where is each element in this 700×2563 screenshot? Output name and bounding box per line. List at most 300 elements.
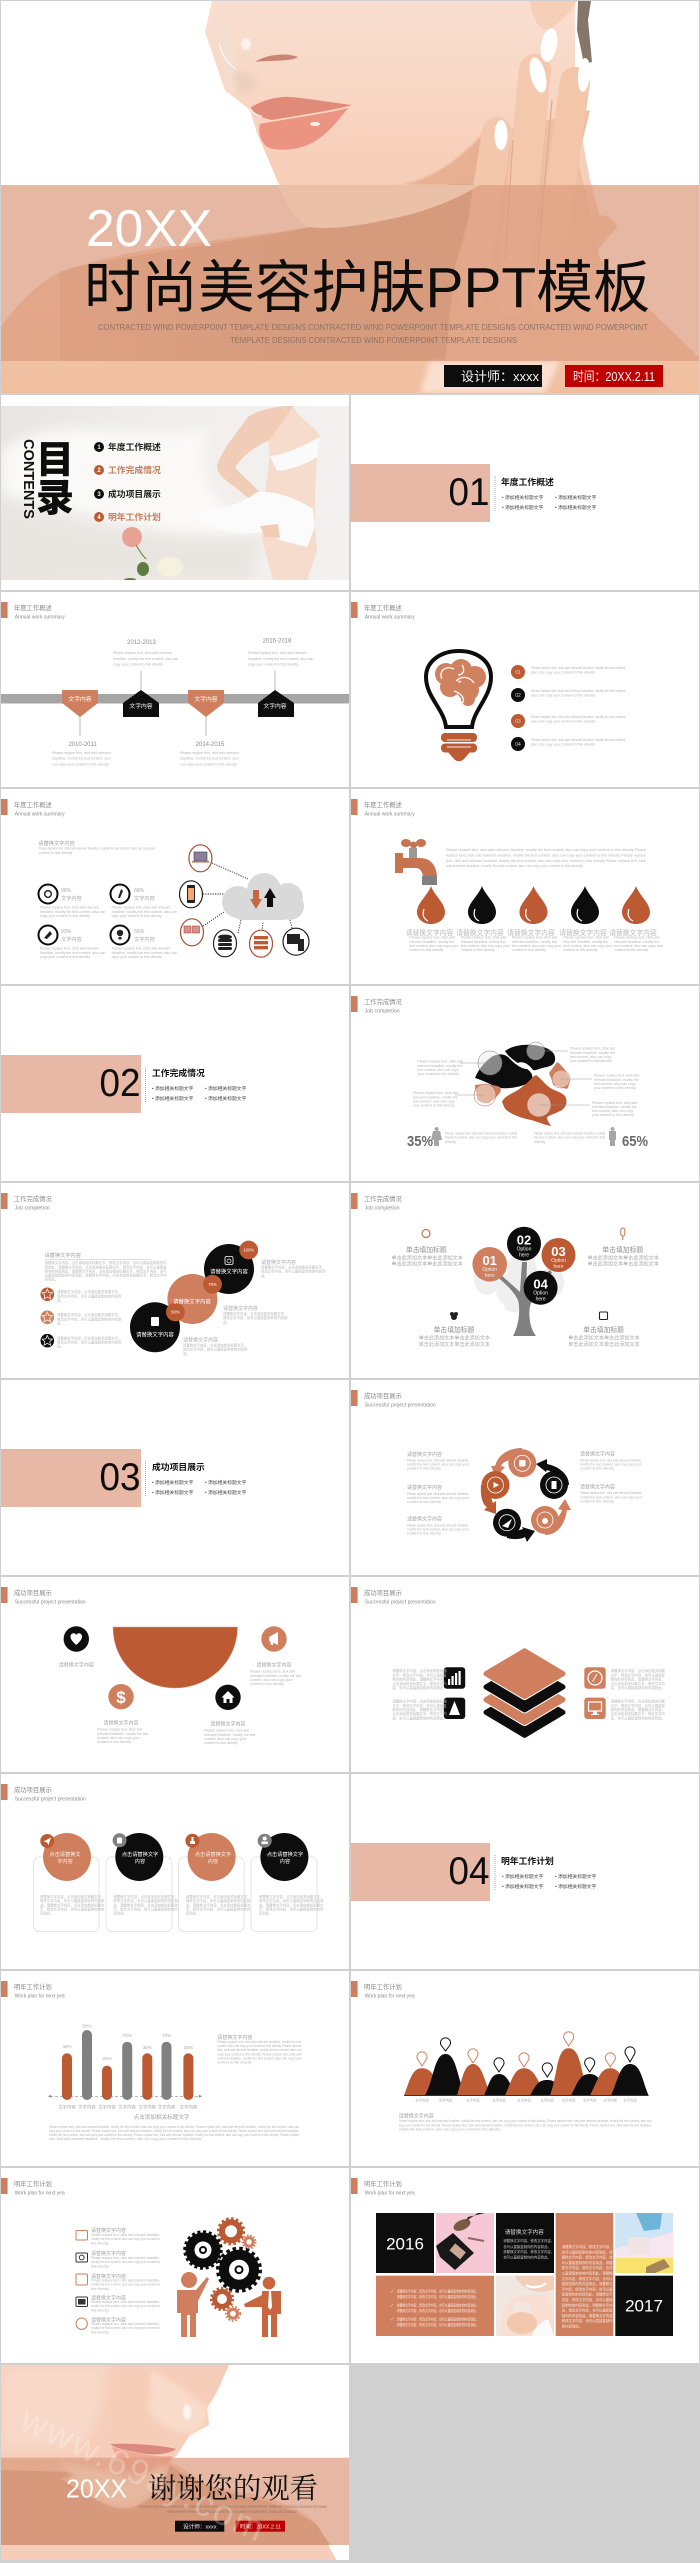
- tree labels: 单击填加标题: [406, 1245, 447, 1254]
- timeline labels: Please replace text, click add relevant: [113, 651, 172, 655]
- intro text: 以直接复制你的内容到此。请替换文字内容，点击添加相关标题文字，修改文字内: [45, 1272, 167, 1277]
- callout text: relevant headline, modify the: [570, 1051, 615, 1055]
- card text: 字，修改文字内容，也可以直接复制你的内: [259, 1906, 324, 1911]
- cell: tall orange text: 也可以直接复制你的内容到此。请: [562, 2249, 613, 2254]
- cycle text: Please replace text, click add relevant headline,: [407, 1458, 469, 1462]
- panel: section 01: • 添加相关标题文字: [502, 504, 544, 511]
- icon list: modify the text content, also can copy your content to: [91, 2283, 160, 2287]
- star list: 请替换文字内容，点击添加相关标题文字，: [57, 1335, 121, 1340]
- icon list: modify the text content, also can copy your content to: [91, 2304, 160, 2308]
- cards: [34, 1833, 317, 1932]
- stats: copy your content to this directly.: [112, 914, 162, 918]
- band: [1, 2458, 349, 2545]
- callout text: relevant headline, modify the: [592, 1105, 637, 1109]
- list: also can copy your content to this directly.: [531, 694, 596, 698]
- paragraph: Please replace text, click add relevant headline, modify the text content, also can copy your content to this directly Please: [446, 848, 646, 852]
- heading: [1, 799, 65, 818]
- panel: gears slide: [1, 2168, 349, 2363]
- gender stats: [407, 1127, 648, 1150]
- chart labels: 文字内容: [623, 2098, 637, 2102]
- list: Please replace text, click add relevant headline, modify the text content,: [531, 689, 626, 693]
- list: [94, 441, 161, 522]
- side text: 点击添加相关标题文字，修改文字内: [611, 1711, 666, 1716]
- heading: 年度工作概述: [14, 603, 52, 612]
- star list: [40, 1288, 122, 1349]
- stats: 文字内容: [134, 935, 155, 943]
- chart note: Please replace text, click add relevant headline, modify the text content, also can copy your content to this directly. Please replace text, click add relevant headline, modify the text content, also can: [399, 2119, 652, 2123]
- drop labels: content to this directly.: [614, 948, 649, 952]
- cell: tall orange text: 修改文字内容，也可以直接复制你: [562, 2318, 613, 2323]
- chart note: 点击添加相关标题文字: [134, 2113, 190, 2121]
- cell: wide orange checklist: ✓: [391, 2304, 394, 2308]
- drops: [417, 886, 650, 924]
- card text: 容到此。: [186, 1910, 200, 1916]
- cell: black text: [496, 2213, 554, 2273]
- side text: 此。: [223, 1320, 230, 1324]
- stacked diamonds: [486, 1651, 563, 1735]
- heading: 工作完成情况: [364, 1194, 402, 1203]
- heading: 工作完成情况: [364, 997, 402, 1006]
- heading: Job completion: [15, 1206, 50, 1212]
- chart note: modify the text content, also can copy your content to this directly. Please replace text, click add relevant headline, modify the text content, also can copy your content to this directly. Please replace: [49, 2133, 299, 2137]
- panel: section 03: • 添加相关标题文字: [152, 1479, 194, 1486]
- cycle text: 请替换文字内容: [407, 1484, 442, 1491]
- title: 目录: 目: [36, 440, 74, 482]
- tree: 01: [482, 1253, 497, 1268]
- timeline: [1, 671, 349, 736]
- timeline labels: can copy your content to this directly.: [52, 762, 109, 766]
- drop labels: relevant headline, modify the: [512, 940, 557, 944]
- bar chart: 70%: [162, 2033, 171, 2038]
- tree labels: 单击此添加文本单击此添加文本: [588, 1260, 659, 1268]
- cell: wide orange checklist: 请替换文字内容，修改文字内容，也可以直接复制你的内容到此。: [397, 2308, 479, 2313]
- closing subtitle: [138, 2505, 327, 2514]
- stats: 文字内容: [61, 894, 82, 902]
- panel: section 04: 明年工作计划: [501, 1855, 554, 1866]
- cell: tall orange text: [556, 2213, 616, 2336]
- callout text: text content, also can copy: [594, 1082, 636, 1086]
- card text: 此。请替换文字内容，点击添加相关标题文: [259, 1902, 324, 1907]
- card text: 此。请替换文字内容，点击添加相关标题文: [40, 1902, 105, 1907]
- cell: tall orange text: 可以直接复制你的内容到此。请替: [562, 2260, 613, 2265]
- intro text: content to this directly.: [38, 851, 73, 855]
- timeline labels: 2014-2015: [196, 742, 225, 748]
- stats: headline, modify the text content, also can: [40, 910, 105, 914]
- cell: tall orange text: 请替换文字内容，修改文字内容，: [562, 2244, 613, 2249]
- cell: tall orange text: 容，修改文字内容，也可以直接复: [562, 2308, 613, 2313]
- labels: 请替换文字内容: [256, 1662, 292, 1668]
- labels: content, also can copy your: [204, 1737, 247, 1741]
- panel: section 03: • 添加相关标题文字: [205, 1479, 247, 1486]
- stats: copy your content to this directly.: [112, 955, 162, 959]
- icon list: Please replace text, click add relevant headline,: [91, 2322, 160, 2326]
- card text: 修改文字内容，也可以直接复制你的内容到: [113, 1898, 178, 1903]
- tree: Option: [517, 1246, 532, 1252]
- panel: cycle slide: [351, 1380, 699, 1575]
- card text: 字，修改文字内容，也可以直接复制你的内: [186, 1906, 251, 1911]
- circle chain: 70%: [208, 1282, 217, 1287]
- side text: 请替换文字内容，点击添加相关标题: [392, 1668, 447, 1673]
- timeline labels: headline, modify the text content, also can: [113, 657, 178, 661]
- panel: contents slide: [1, 395, 349, 590]
- drop labels: text content, also can copy your: [512, 944, 562, 948]
- heading: [351, 1981, 415, 2000]
- bar chart: 文字内容: [58, 2104, 76, 2110]
- bar chart: 文字内容: [78, 2104, 96, 2110]
- panel: light bulb slide: [351, 592, 699, 787]
- map pins: [417, 2032, 635, 2077]
- heading: 年度工作概述: [14, 800, 52, 809]
- closing subtitle: POWERPOINT TEMPLATE DESIGNS CONTRACTED WIND POWERPOINT TEMPLATE DESIGNS: [167, 2510, 297, 2514]
- drop labels: 请替换文字内容: [456, 928, 504, 937]
- panel: section 04: [350, 1774, 699, 1969]
- timeline labels: can copy your content to this directly.: [180, 762, 237, 766]
- list: 1: [97, 445, 101, 451]
- card text: 容到此。: [40, 1910, 54, 1916]
- side text: content, also can copy your content to this directly. Please replace: [217, 2044, 301, 2048]
- heading: Successful project presentation: [15, 1796, 86, 1802]
- icon list: this directly.: [91, 2330, 109, 2334]
- designer tag: 设计师：xxxx: [461, 369, 540, 384]
- drop labels: Please replace text, click add: [409, 936, 455, 940]
- heading: Annual work summary: [365, 812, 415, 818]
- heading: [351, 2178, 415, 2196]
- timeline: 文字内容: [263, 702, 287, 710]
- tree: 04: [533, 1276, 549, 1292]
- panel: section 02: • 添加相关标题文字: [152, 1095, 194, 1102]
- labels: relevant headline, modify the text: [204, 1733, 255, 1737]
- heading: Work plan for next yea: [365, 1994, 415, 2000]
- chart note: [399, 2112, 652, 2132]
- panel: section 03: • 添加相关标题文字: [205, 1489, 247, 1496]
- chart labels: 文字内容: [492, 2098, 506, 2102]
- card text: 修改文字内容，也可以直接复制你的内容到: [259, 1898, 324, 1903]
- cycle text: Please replace text, click add relevant headline,: [407, 1492, 469, 1496]
- callout text: relevant headline, modify the: [594, 1078, 639, 1082]
- chart labels: 文字内容: [517, 2098, 531, 2102]
- chart labels: [415, 2098, 637, 2102]
- panel: section 04: • 添加相关标题文字: [502, 1883, 544, 1890]
- tree labels: 单击此添加文本单击此添加文本: [392, 1254, 463, 1262]
- chart note: modify the text content, also can copy your content to this directly.: [399, 2128, 501, 2132]
- callout text: Please replace text, click add: [592, 1101, 637, 1105]
- list: also can copy your content to this directly.: [531, 742, 596, 746]
- cell: wide orange checklist: [376, 2276, 494, 2336]
- drop labels: text content, also can copy your: [614, 944, 664, 948]
- gender stats: directly.: [445, 1140, 457, 1144]
- heading: [1, 2178, 65, 2196]
- stats: 文字内容: [61, 935, 82, 943]
- panel: section 01: • 添加相关标题文字: [555, 504, 597, 511]
- callout text: your content to this directly.: [592, 1113, 634, 1117]
- side text: 请替换文字内容: [217, 2034, 252, 2041]
- bar chart: 文字内容: [139, 2104, 157, 2110]
- side text: 此。: [183, 1351, 190, 1356]
- list: also can copy your content to this directly.: [531, 720, 596, 724]
- cell: woman with glass photo: [496, 2276, 554, 2336]
- panel: water drops slide: [351, 789, 699, 984]
- cell: tall orange text: 直接复制你的内容到此。请替换文: [562, 2281, 613, 2286]
- closing tags: [175, 2521, 285, 2532]
- heading: [1, 1193, 52, 1212]
- tree: Option: [533, 1290, 548, 1296]
- cloud network: [180, 845, 309, 957]
- star list: 修改文字内容，也可以直接复制你的内容到: [57, 1316, 122, 1321]
- drop labels: relevant headline, modify the: [614, 940, 659, 944]
- heading: [351, 1193, 402, 1212]
- tree: 02: [517, 1232, 531, 1248]
- icon list: 请替换文字内容: [91, 2273, 126, 2280]
- cycle text: modify the text content, also can copy your: [407, 1462, 470, 1466]
- cell: 2017: [615, 2276, 673, 2336]
- callout text: Please replace text, click add: [417, 1060, 463, 1064]
- list: 01: [515, 670, 521, 676]
- labels: 请替换文字内容: [210, 1720, 246, 1728]
- callout text: your content to this directly.: [413, 1104, 455, 1108]
- list: 3: [97, 492, 101, 498]
- cycle text: Please replace text, click add relevant headline,: [407, 1524, 469, 1528]
- stats: headline, modify the text content, also can: [40, 951, 105, 955]
- heading: [351, 996, 402, 1014]
- side text: 制你的内容到此。请替换文字内容，: [392, 1707, 447, 1712]
- list: 04: [515, 742, 521, 748]
- tree: Option: [482, 1267, 497, 1273]
- cycle text: [407, 1450, 643, 1536]
- card text: 字，修改文字内容，也可以直接复制你的内: [40, 1906, 105, 1911]
- stats: [38, 884, 177, 959]
- heading: Successful project presentation: [365, 1402, 436, 1408]
- cell: tall orange text: 文字内容，修改文字内容，也可以: [562, 2276, 613, 2281]
- stats: copy your content to this directly.: [40, 914, 91, 918]
- labels: Please replace text, click add: [97, 1728, 142, 1732]
- side text: 此。: [261, 1273, 268, 1278]
- chart labels: 文字内容: [415, 2098, 429, 2102]
- side text: 文字，修改文字内容，也可以直接复: [392, 1672, 447, 1678]
- callout text: Please replace text, click add: [570, 1046, 615, 1050]
- icon: faucet: [395, 839, 437, 885]
- intro text: [38, 839, 156, 855]
- timeline labels: Please replace text, click add relevant: [180, 751, 239, 755]
- icon list: this directly.: [91, 2308, 109, 2312]
- list: 02: [515, 693, 521, 699]
- heading: [1, 602, 65, 620]
- heading: Successful project presentation: [15, 1600, 86, 1606]
- list: 年度工作概述: [108, 441, 161, 452]
- closing title: 谢谢您的观看: [148, 2473, 318, 2505]
- stats: 93%: [61, 929, 72, 935]
- side text: copy your content to this directly. Please replace text, click add: [217, 2052, 301, 2056]
- side text: 制你的内容到此。请替换文字内容，: [611, 1676, 665, 1682]
- heading: [351, 1587, 436, 1606]
- drop labels: content to this directly.: [512, 948, 547, 952]
- labels: 请替换文字内容: [103, 1720, 139, 1726]
- star list: 此。: [57, 1320, 64, 1325]
- panel: section 01: [350, 395, 699, 590]
- card text: 字，修改文字内容，也可以直接复制你的内: [113, 1906, 178, 1911]
- drop labels: relevant headline, modify the: [461, 940, 506, 944]
- drop labels: Please replace text, click add: [461, 936, 506, 940]
- paragraph: add relevant headline, modify the text content, also can copy your content to this directly.: [446, 864, 583, 868]
- tree labels: 单击填加标题: [602, 1245, 643, 1254]
- list: 4: [97, 515, 101, 521]
- star list: 此。: [57, 1297, 64, 1302]
- callout text: text content, also can copy: [570, 1055, 612, 1059]
- cell: tall orange text: 换文字内容，修改文字内容，也可: [562, 2265, 613, 2270]
- star list: 请替换文字内容，点击添加相关标题文字，: [57, 1312, 121, 1317]
- side text: 修改文字内容，也可以直接复制你的内容到: [261, 1268, 326, 1274]
- tree: [472, 1227, 576, 1336]
- stats: headline, modify the text content, also can: [112, 951, 177, 955]
- bar chart: [48, 2024, 202, 2110]
- photo: body with silk: [1, 406, 349, 582]
- tree labels: 单击填加标题: [583, 1325, 624, 1334]
- cell: tall orange text: 字内容，修改文字内容，也可以直: [562, 2286, 613, 2291]
- tree labels: 单击此添加文本单击此添加文本: [419, 1334, 490, 1342]
- panel: section 04: • 添加相关标题文字: [555, 1873, 597, 1880]
- tree: here: [519, 1252, 529, 1258]
- chart labels: 文字内容: [583, 2098, 597, 2102]
- side text: 容，也可以直接复制你的内容到此。: [611, 1716, 665, 1720]
- side text: [217, 2034, 302, 2064]
- date tag: [565, 365, 663, 387]
- star list: 修改文字内容，也可以直接复制你的内容到: [57, 1340, 122, 1345]
- mountain chart: [404, 2048, 649, 2096]
- cell: 2016: [376, 2213, 434, 2273]
- star list: 此。: [57, 1344, 64, 1349]
- drop labels: 请替换文字内容: [609, 928, 657, 937]
- side text: 点击添加相关标题文字，修改文字内: [392, 1681, 447, 1686]
- labels: content to this directly.: [204, 1741, 239, 1745]
- drop labels: 请替换文字内容: [406, 928, 453, 937]
- panel: brain chart slide: [351, 986, 699, 1181]
- circle chain: [130, 1241, 258, 1352]
- gender stats: directly.: [534, 1140, 546, 1144]
- panel: section 04: • 添加相关标题文字: [502, 1873, 544, 1880]
- list: 工作完成情况: [108, 464, 161, 475]
- cell: tall orange text: 替换文字内容，修改文字内容，也: [562, 2255, 613, 2260]
- side text: Please replace text, click add relevant headline, modify the text: [217, 2040, 301, 2044]
- icon badges: [64, 1626, 287, 1710]
- chart labels: 文字内容: [439, 2098, 453, 2102]
- timeline labels: copy your content to this directly.: [113, 662, 164, 666]
- cards: 字内容: [57, 1857, 73, 1865]
- timeline: 文字内容: [194, 695, 218, 703]
- side text: 请替换文字内容，点击添加相关标题: [611, 1668, 666, 1673]
- circle chain: 请替换文字内容: [210, 1268, 248, 1276]
- callout text: relevant headline, modify the: [417, 1064, 462, 1068]
- cards: 内容: [208, 1857, 218, 1865]
- cell: tall orange text: 接复制你的内容到此。请替换文字: [562, 2292, 613, 2297]
- heading: 成功项目展示: [14, 1588, 52, 1597]
- panel: cover slide: [1, 1, 700, 393]
- list: 03: [515, 719, 521, 725]
- list: 明年工作计划: [108, 511, 161, 522]
- stats: 55%: [134, 929, 145, 935]
- chart labels: 文字内容: [562, 2098, 576, 2102]
- side text: 点击添加相关标题文字，修改文字内: [611, 1681, 666, 1686]
- tree labels: 单击填加标题: [434, 1325, 475, 1334]
- cycle text: Please replace text, click add relevant headline,: [580, 1491, 642, 1495]
- cell: black text: 请替换文字内容，修改文字内容，: [503, 2238, 554, 2243]
- panel: section 02: [1, 986, 349, 1181]
- drop labels: text content, also can copy your: [563, 944, 613, 948]
- cycle text: modify the text content, also can copy your: [580, 1495, 643, 1499]
- panel: section 02: • 添加相关标题文字: [152, 1085, 194, 1092]
- panel: tree slide: [351, 1183, 699, 1378]
- tree labels: [392, 1228, 659, 1348]
- panel: section 04: • 添加相关标题文字: [555, 1883, 597, 1890]
- drop labels: relevant headline, modify the: [563, 940, 608, 944]
- timeline labels: 2016-2018: [263, 638, 292, 644]
- drop labels: content to this directly.: [563, 948, 598, 952]
- side text: [183, 1259, 326, 1356]
- stats: 文字内容: [134, 894, 155, 902]
- side text: relevant headline, modify the text content, also can copy your: [217, 2056, 302, 2060]
- cycle text: content to this directly.: [407, 1466, 442, 1470]
- intro text: 容到此。: [45, 1276, 58, 1281]
- heading: [351, 799, 415, 818]
- panel: section 01: • 添加相关标题文字: [502, 494, 544, 501]
- gender stats: Please replace text, click add relevant headline, modify: [445, 1132, 517, 1136]
- circle chain: 请替换文字内容: [173, 1298, 211, 1306]
- card text: 请替换文字内容，点击添加相关标题文字，: [113, 1894, 178, 1899]
- heading: 明年工作计划: [364, 1982, 402, 1991]
- heading: 明年工作计划: [14, 1982, 52, 1991]
- heading: Work plan for next yea: [15, 1994, 65, 2000]
- chart note: copy your content to this directly. Please replace text, click add relevant headline, modify the text content, also can copy your content to this directly. Please replace text, click add relevant headline,: [49, 2129, 299, 2133]
- labels: relevant headline, modify the text: [97, 1732, 148, 1736]
- cycle arrows: [481, 1448, 571, 1542]
- drop labels: text content, also can copy your: [461, 944, 511, 948]
- panel: bar chart slide: [1, 1971, 349, 2166]
- list: Please replace text, click add relevant headline, modify the text content,: [531, 738, 626, 742]
- callout text: text content, also can copy: [413, 1100, 455, 1104]
- tree labels: 单击此添加文本单击此添加文本: [588, 1254, 659, 1262]
- cycle text: modify the text content, also can copy your: [580, 1462, 643, 1466]
- drop labels: [406, 928, 664, 952]
- drop labels: Please replace text, click add: [563, 936, 609, 940]
- cards: 内容: [280, 1857, 290, 1865]
- gender stats: the text content, also can copy your content to this: [445, 1136, 517, 1140]
- circle chain: 50%: [171, 1310, 180, 1314]
- labels: content, also can copy your: [250, 1678, 293, 1682]
- chart note: Please replace text, click add relevant headline, modify the text content, also can copy your content to this directly. Please replace text, click add relevant headline, modify the text content, also can: [49, 2125, 299, 2129]
- heading: 年度工作概述: [364, 800, 402, 809]
- heading: [1, 1981, 65, 2000]
- photo: face: [1, 2365, 337, 2561]
- stats: 68%: [134, 888, 145, 894]
- side text: 请替换文字内容，点击添加相关标题文字，: [183, 1342, 247, 1348]
- cycle text: 请替换文字内容: [407, 1451, 442, 1458]
- panel: section 01: 01: [448, 471, 490, 514]
- cell: tall orange text: 的内容到此。: [562, 2324, 582, 2328]
- labels: relevant headline, modify the text: [250, 1674, 301, 1678]
- icon list: 请替换文字内容: [91, 2227, 126, 2234]
- side text: 点击添加相关标题文字，修改文字内: [392, 1711, 447, 1716]
- cell: wide orange checklist: 请替换文字内容，修改文字内容，也可以直接复制你的内容到此。: [397, 2294, 479, 2299]
- cell: wide orange checklist: 请替换文字内容，修改文字内容，也可以直接复制你的内容到此。: [397, 2288, 479, 2294]
- drop labels: 请替换文字内容: [559, 928, 607, 937]
- side text: 请替换文字内容，点击添加相关标题文字，: [261, 1264, 325, 1270]
- cell: tall orange text: 以直接复制你的内容到此。请替换: [562, 2270, 613, 2276]
- gears and people: [177, 2218, 281, 2337]
- panel: mountains chart slide: [351, 1971, 699, 2166]
- tree: 03: [551, 1244, 566, 1259]
- heading: 成功项目展示: [364, 1391, 402, 1400]
- intro text: 请替换文字内容: [45, 1251, 81, 1259]
- drop labels: Please replace text, click add: [512, 936, 557, 940]
- half circle: [113, 1627, 238, 1688]
